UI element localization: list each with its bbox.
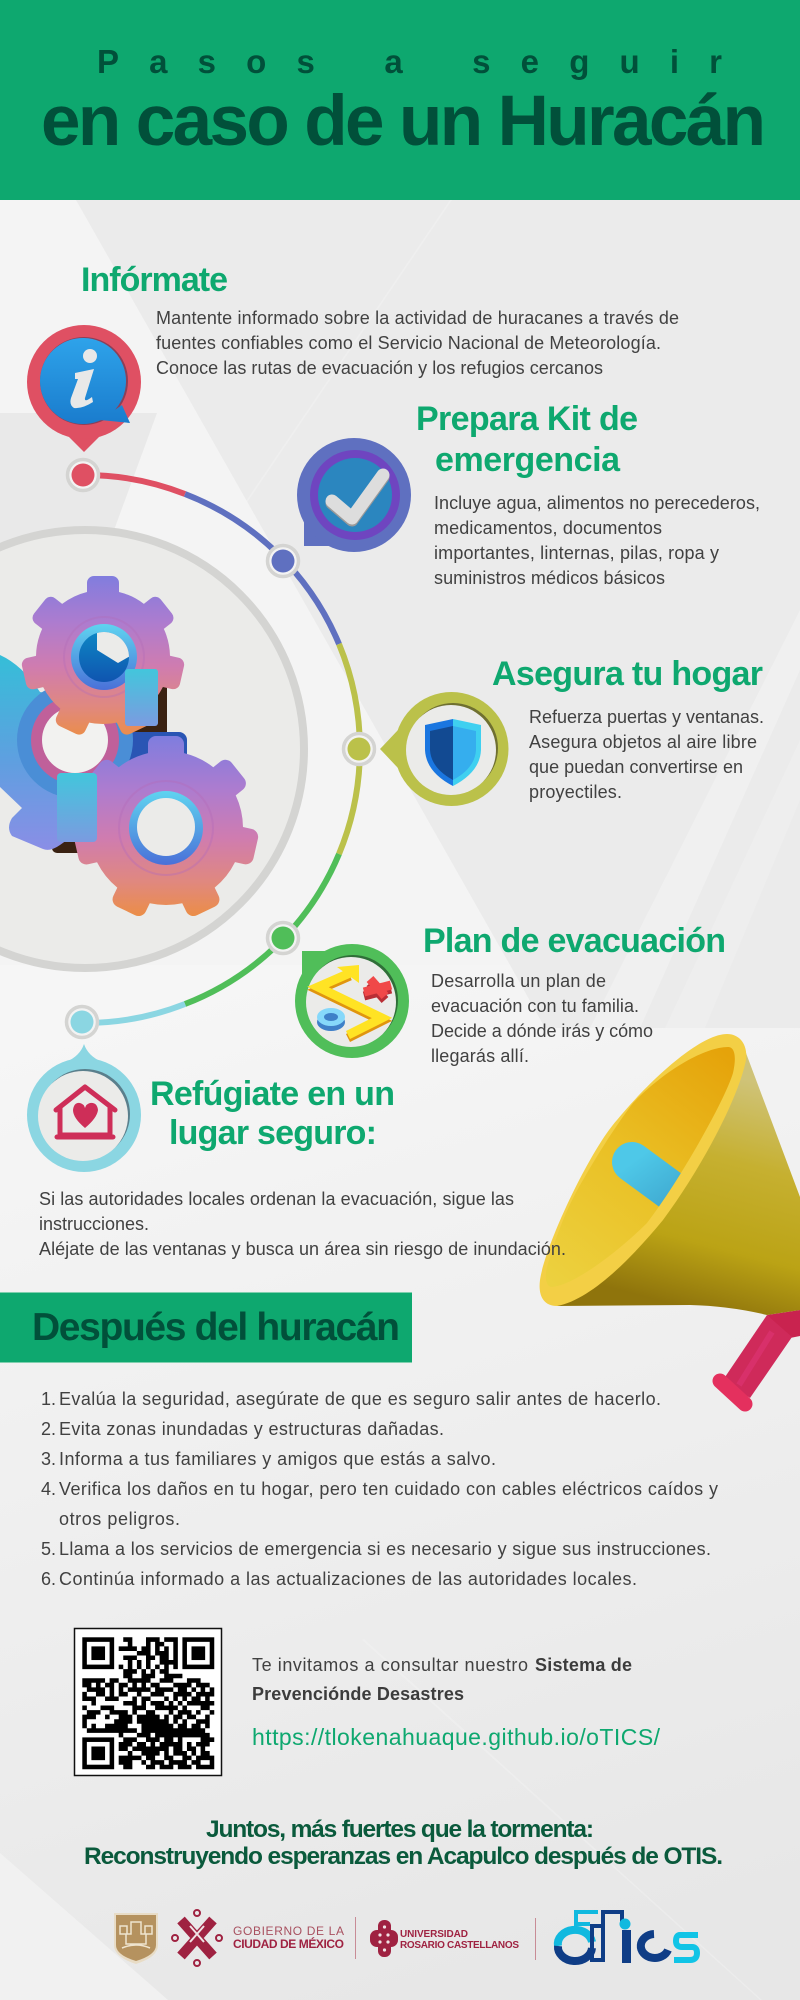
QR invitation text: [252, 1655, 661, 1750]
icon: checkmark pin: [297, 438, 411, 552]
timeline arc: [85, 475, 360, 1023]
heading: Plan de evacuación: Plan de evacuación: [423, 922, 726, 960]
numbered list: 2.: [41, 1419, 56, 1439]
text block: Infórmate: Mantente informado sobre la actividad de huracanes a través de: [156, 308, 679, 328]
gears illustration panel: [0, 530, 304, 968]
icon: shield pin: [380, 692, 508, 806]
knot icon: [172, 1910, 222, 1966]
heading: Refúgiate en un lugar seguro: [150, 1075, 395, 1152]
heading: Prepara Kit de emergencia: Prepara Kit de: [416, 400, 638, 438]
logo: Universidad Rosario Castellanos: [370, 1920, 519, 1957]
blue blocks: [57, 669, 158, 842]
text block: Plan: Decide a dónde irás y cómo: [431, 1021, 653, 1041]
section heading: Después del huracán: [0, 1292, 412, 1363]
text block: Infórmate: fuentes confiables como el Servicio Nacional de Meteorología.: [156, 333, 661, 353]
text block: Prepara Kit: [434, 493, 760, 588]
logo: Gobierno CDMX: [172, 1910, 344, 1966]
text block: Infórmate: Conoce las rutas de evacuación y los refugios cercanos: [156, 358, 603, 378]
text block: Asegura: Asegura objetos al aire libre: [529, 732, 757, 752]
logo: Gobierno CDMX: CIUDAD DE MÉXICO: [233, 1936, 344, 1951]
numbered list: Evalúa la seguridad, asegúrate de que es seguro salir antes de hacerlo.: [59, 1389, 661, 1409]
top gear: [22, 576, 184, 735]
heading: Refúgiate en un lugar seguro: lugar seguro:: [169, 1114, 377, 1152]
icon: evacuation plan pin: [295, 944, 409, 1058]
cross icon: [370, 1920, 398, 1957]
logo: coat of arms: [114, 1913, 158, 1964]
text block: Prepara Kit: suministros médicos básicos: [434, 568, 665, 588]
closing tagline: Reconstruyendo esperanzas en Acapulco después de OTIS.: [84, 1843, 723, 1870]
text block: Prepara Kit: importantes, linternas, pilas, ropa y: [434, 543, 719, 563]
text block: Asegura: proyectiles.: [529, 782, 622, 802]
bottom gear: [74, 736, 258, 916]
text block: Plan: llegarás allí.: [431, 1046, 529, 1066]
section: Infórmate: [81, 261, 679, 378]
section heading: Después del huracán: Después del huracán: [32, 1306, 400, 1349]
closing tagline: Juntos, más fuertes que la tormenta:: [206, 1816, 594, 1843]
QR code: [74, 1628, 222, 1776]
logo: Universidad Rosario Castellanos: UNIVERSIDAD: [400, 1929, 468, 1940]
numbered list: [41, 1389, 718, 1589]
text block: Plan: Desarrolla un plan de: [431, 971, 606, 991]
logo: Gobierno CDMX: GOBIERNO DE LA: [233, 1924, 344, 1938]
section: Prepara Kit: [416, 400, 760, 588]
numbered list: otros peligros.: [59, 1509, 180, 1529]
link: https://tlokenahuaque.github.io/oTICS/: [252, 1724, 661, 1750]
dark block behind gears: [52, 655, 167, 853]
section: Asegura tu hogar: [492, 655, 764, 802]
closing tagline: [84, 1816, 723, 1870]
icon: info pin: [27, 325, 141, 452]
QR invitation text: Sistema de: [535, 1655, 632, 1675]
title line 1: Pasos a seguir: [97, 43, 722, 80]
divider: [355, 1917, 356, 1959]
text block: Prepara Kit: Incluye agua, alimentos no perecederos,: [434, 493, 760, 513]
heading: Infórmate: Infórmate: [81, 261, 228, 299]
numbered list: 5.: [41, 1539, 56, 1559]
heading: Prepara Kit de emergencia: emergencia: [435, 441, 621, 479]
text block: Plan: evacuación con tu familia.: [431, 996, 639, 1016]
icon: megaphone: [540, 1034, 800, 1404]
numbered list: Continúa informado a las actualizaciones de las autoridades locales.: [59, 1569, 637, 1589]
section: Plan de evacuación: [423, 922, 726, 1066]
numbered list: 1.: [41, 1389, 56, 1409]
heading: Prepara Kit de emergencia: [416, 400, 638, 479]
text block: Asegura: que puedan convertirse en: [529, 757, 743, 777]
text block: Prepara Kit: medicamentos, documentos: [434, 518, 662, 538]
text block: Plan: [431, 971, 653, 1066]
text block: Refúgiate: instrucciones.: [39, 1214, 149, 1234]
numbered list: Verifica los daños en tu hogar, pero ten cuidado con cables eléctricos caídos y: [59, 1479, 718, 1499]
heading: Asegura tu hogar: Asegura tu hogar: [492, 655, 763, 693]
numbered list: Informa a tus familiares y amigos que estás a salvo.: [59, 1449, 496, 1469]
heading: Refúgiate en un lugar seguro: Refúgiate en un: [150, 1075, 395, 1113]
text block: Asegura: [529, 707, 764, 802]
numbered list: 6.: [41, 1569, 56, 1589]
numbered list: Evita zonas inundadas y estructuras dañadas.: [59, 1419, 444, 1439]
text block: Asegura: Refuerza puertas y ventanas.: [529, 707, 764, 727]
logo: Universidad Rosario Castellanos: ROSARIO CASTELLANOS: [400, 1940, 519, 1951]
text block: Refúgiate: Aléjate de las ventanas y busca un área sin riesgo de inundación.: [39, 1239, 566, 1259]
QR invitation text: Prevenciónde Desastres: [252, 1684, 464, 1704]
numbered list: 3.: [41, 1449, 56, 1469]
divider: [535, 1918, 536, 1960]
QR invitation text: Te invitamos a consultar nuestro: [252, 1655, 528, 1675]
text block: Infórmate: [156, 308, 679, 378]
numbered list: Llama a los servicios de emergencia si es necesario y sigue sus instrucciones.: [59, 1539, 711, 1559]
icon: house pin: [27, 1044, 141, 1172]
back gear: [0, 655, 187, 850]
numbered list: 4.: [41, 1479, 56, 1499]
header band: [0, 0, 800, 200]
title line 2: en caso de un Huracán: [41, 82, 766, 161]
timeline nodes: [66, 460, 374, 1038]
section: Refúgiate: [39, 1075, 566, 1259]
text block: Refúgiate: Si las autoridades locales ordenan la evacuación, sigue las: [39, 1189, 514, 1209]
logo: oTICS: [558, 1912, 698, 1963]
text block: Refúgiate: [39, 1189, 566, 1259]
